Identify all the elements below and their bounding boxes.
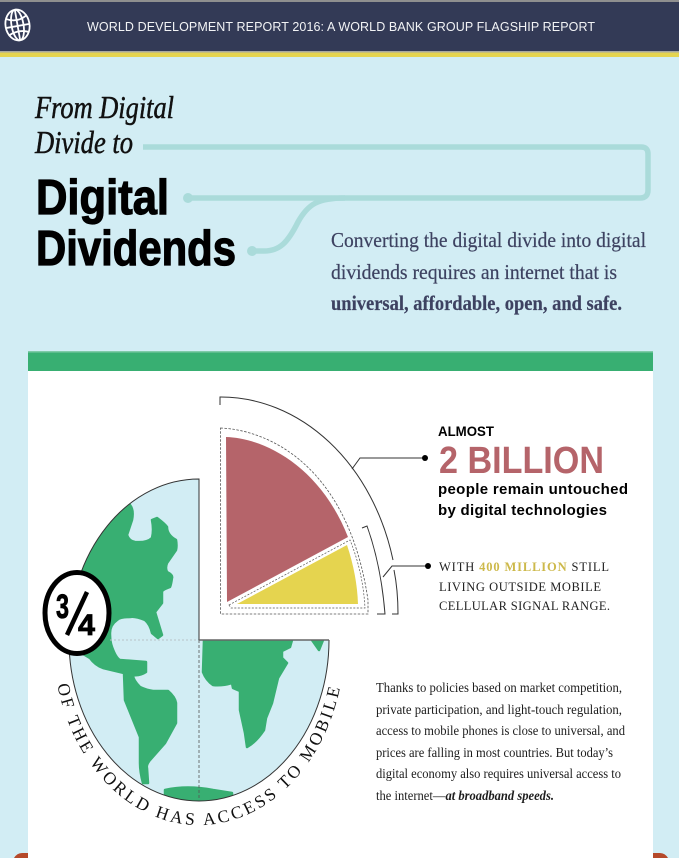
body paragraph: [376, 680, 625, 803]
body paragraph: Thanks to policies based on market competition,: [376, 680, 622, 695]
globe chart: [60, 479, 329, 810]
connector lines: [143, 147, 648, 256]
callout: 400 million: WITH 400 MILLION STILL: [439, 560, 609, 574]
callout: 2 billion: [438, 423, 628, 519]
callout: 2 billion: 2 BILLION: [439, 440, 604, 482]
header title: WORLD DEVELOPMENT REPORT 2016: A WORLD BANK GROUP FLAGSHIP REPORT: [87, 20, 595, 34]
callout: 2 billion: people remain untouched: [438, 481, 628, 498]
callout: 2 billion: by digital technologies: [438, 502, 607, 519]
continents: [82, 504, 324, 800]
title: Digital Dividends: Digital: [36, 171, 169, 225]
intro paragraph: [331, 228, 646, 315]
title: From Digital Divide to: From Digital: [34, 90, 174, 125]
badge: three quarters: [45, 572, 109, 654]
title: Digital Dividends: Dividends: [36, 222, 236, 276]
title: From Digital Divide to: Divide to: [34, 125, 133, 160]
panel: white content card: [28, 351, 653, 858]
header band: [0, 0, 679, 57]
brackets and leader lines: [220, 397, 431, 614]
callout: 400 million: CELLULAR SIGNAL RANGE.: [439, 599, 610, 613]
title: From Digital Divide to: [34, 90, 174, 160]
callout: 2 billion: ALMOST: [438, 423, 494, 439]
wedge: 400 million: [237, 545, 358, 604]
body paragraph: the internet—at broadband speeds.: [376, 788, 554, 803]
wedge: 2 billion: [226, 437, 348, 602]
callout: 400 million: LIVING OUTSIDE MOBILE: [439, 580, 601, 594]
icon: World Bank globe: [3, 8, 32, 42]
intro paragraph: universal, affordable, open, and safe.: [331, 291, 622, 315]
pie wedge chart: [220, 428, 368, 614]
body paragraph: digital economy also requires universal access to: [376, 766, 621, 781]
next panel corners: [14, 853, 668, 858]
badge: three quarters: 4: [78, 609, 95, 642]
intro paragraph: Converting the digital divide into digital: [331, 228, 646, 252]
callout: 400 million: [439, 560, 610, 613]
curved caption: OF THE WORLD HAS ACCESS TO MOBILE: [58, 684, 340, 826]
body paragraph: prices are falling in most countries. But today’s: [376, 745, 613, 760]
intro paragraph: dividends requires an internet that is: [331, 260, 617, 284]
body paragraph: private participation, and light-touch regulation,: [376, 702, 622, 717]
badge: three quarters: 3: [56, 588, 69, 626]
body paragraph: access to mobile phones is close to universal, and: [376, 723, 625, 738]
title: Digital Dividends: [36, 171, 236, 276]
